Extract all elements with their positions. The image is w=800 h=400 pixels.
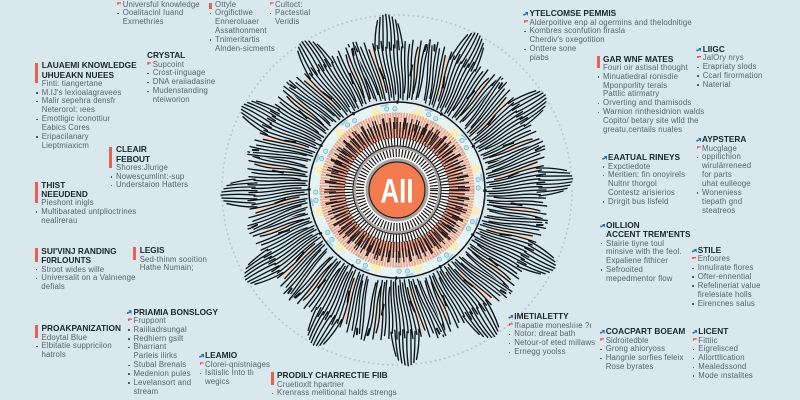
list: Innulirate flores xyxy=(698,263,754,272)
icon: blue arrow xyxy=(696,138,701,142)
petal: top xyxy=(344,13,438,103)
heading xyxy=(41,180,88,199)
list: Clorei-qnistniages xyxy=(205,360,270,369)
heading: LAUAEMI KNOWLEDGE xyxy=(42,60,137,70)
list: Krenrass melitional halds strengs xyxy=(277,388,397,397)
list: Medenion pules xyxy=(134,369,191,378)
list: Neterorol: ıees xyxy=(42,105,95,114)
list: Cruetioxlt hpartrier xyxy=(277,380,344,389)
list: Eigrelisced xyxy=(698,344,738,353)
text block: thist neeudend xyxy=(35,180,136,225)
text block: knowledge xyxy=(35,60,137,150)
petal: 90 degrees xyxy=(484,137,574,231)
list: Drirgit bus lisfeld xyxy=(608,197,668,206)
list: Redhiern gsilt xyxy=(134,334,183,343)
list xyxy=(697,53,762,89)
list: Meritien: fin onoyirels xyxy=(608,170,685,179)
list: Alnden-sicments xyxy=(215,44,275,53)
list: Ofter-ennential xyxy=(698,272,752,281)
list: Isitislic Into tlı xyxy=(205,368,254,377)
marker bar xyxy=(35,325,38,338)
list: Parleis ilirks xyxy=(134,351,177,360)
petal ring xyxy=(221,13,575,367)
marker bar xyxy=(35,248,38,262)
list: Understaion Hatters xyxy=(116,180,188,189)
marker bar xyxy=(35,182,38,203)
text block: liigc xyxy=(696,44,762,89)
list: Exrnethries xyxy=(123,17,164,26)
list: Enfoores xyxy=(698,254,730,263)
text block: coacpart boeam xyxy=(600,326,685,371)
list: Stairie tiyne toul xyxy=(606,238,664,248)
list: uhat eulleoge xyxy=(702,179,751,188)
list xyxy=(36,264,136,291)
list: Sidroitedble xyxy=(606,336,649,345)
heading: PRODILY CHARRECTIE FIIB xyxy=(277,370,388,380)
list: stream xyxy=(134,387,158,396)
list: Grong ahioryoss xyxy=(606,344,665,353)
text block: cleair febout xyxy=(109,144,188,189)
petal: 270 degrees xyxy=(221,146,309,237)
heading xyxy=(42,60,137,80)
marker bar xyxy=(35,63,38,83)
icon: blue arrow xyxy=(602,156,607,160)
list: tiepath gnd xyxy=(702,197,742,206)
list: Mode ınstalites xyxy=(698,371,753,380)
list: Woneniess xyxy=(702,188,742,197)
heading xyxy=(606,220,690,239)
list xyxy=(128,316,191,396)
text block: licent xyxy=(692,326,753,380)
list: Pattlic atirmatry xyxy=(603,89,659,98)
list: Expctiedote xyxy=(608,162,650,171)
list: Nultnr thorgol xyxy=(608,179,657,188)
icon: blue arrow xyxy=(696,48,701,52)
text block: ottyle xyxy=(209,0,275,53)
list: steatreos xyxy=(702,206,735,214)
heading: COACPART BOEAM xyxy=(606,326,685,336)
petal: 330 degrees xyxy=(266,21,389,135)
list: Lieptmiaxicm xyxy=(42,141,89,150)
heading xyxy=(41,246,117,265)
text block: universal knowledge xyxy=(117,0,200,26)
list: Levelansort and xyxy=(134,378,191,387)
text block: imetialetty xyxy=(508,311,595,356)
list: Mudenstanding xyxy=(153,86,208,95)
heading: AYPSTERA xyxy=(702,134,746,144)
salmon and dark spike ring xyxy=(330,123,464,257)
heading: EAATUAL RINEYS xyxy=(608,152,680,162)
text block: gar wnf mates xyxy=(597,54,704,134)
petal: 150 degrees xyxy=(407,244,530,358)
list xyxy=(36,79,121,150)
list: wirulärreneed xyxy=(702,161,751,170)
list: for parts xyxy=(702,170,732,179)
list: Finti: tiangertane xyxy=(42,79,102,88)
list: Pieshont inigls xyxy=(41,198,94,207)
list xyxy=(692,254,761,308)
heading: THIST xyxy=(41,180,65,190)
marker bar xyxy=(109,147,112,168)
marker bar xyxy=(209,3,212,9)
list xyxy=(598,63,704,134)
marker bar xyxy=(597,56,600,68)
list: Contestz arisierios xyxy=(608,188,675,197)
list: Veridis xyxy=(275,17,299,26)
icon: blue arrow xyxy=(508,315,513,319)
heading xyxy=(116,144,150,164)
list: Mealedssond xyxy=(698,362,746,371)
list: Ooalitacinl Iuand xyxy=(123,8,183,17)
list: Hangnle sorfies feleix xyxy=(606,353,684,362)
list: Supcoint xyxy=(153,60,184,69)
heading: LEGIS xyxy=(140,245,165,255)
list xyxy=(601,238,682,283)
list: Copito/ betary site wlld the xyxy=(603,116,699,125)
heading: F0RLOUNTS xyxy=(41,255,91,265)
list: Refelineriat value xyxy=(698,281,761,290)
text block: prodily charrectie xyxy=(271,370,397,397)
list: Cherdiv's oxegotition xyxy=(530,35,605,44)
list: DNA eraiiadasine xyxy=(153,77,215,86)
list: Minuatiedral ronisdie xyxy=(603,72,678,81)
list: nteiworion xyxy=(153,95,190,104)
list: Mponporlity terals xyxy=(603,81,667,90)
list: Erapriaty slods xyxy=(703,62,757,71)
list: Emotligic iconottiur xyxy=(42,114,110,123)
text block: priamia bonslogy xyxy=(127,307,218,396)
list xyxy=(270,0,310,26)
list: Raiiliadrsungal xyxy=(134,325,187,334)
petal: 210 degrees xyxy=(278,244,387,366)
heading: PROAKPANIZATION xyxy=(42,323,121,333)
list: Sefrooited xyxy=(606,265,643,274)
icon: blue arrow xyxy=(692,330,697,334)
text block: eaatual rineys xyxy=(602,152,685,206)
petal: bottom xyxy=(356,277,450,367)
text block: welcomse pemmis xyxy=(523,8,692,62)
list: Enneroluaer xyxy=(215,17,259,26)
list xyxy=(111,163,188,189)
inner disc with ornaments xyxy=(307,100,487,280)
list: Eabics Cores xyxy=(42,123,90,132)
heading: LEAMIO xyxy=(205,350,237,360)
petal: 120 degrees xyxy=(454,197,575,304)
list xyxy=(147,60,215,104)
heading: OILLION xyxy=(606,220,640,230)
center badge xyxy=(369,162,425,218)
list: Fittiic xyxy=(698,336,718,345)
list: Kombres sconfution firasla xyxy=(530,26,625,35)
list: hatrols xyxy=(42,350,66,359)
marker bar xyxy=(271,372,274,385)
list: Allorttlication xyxy=(698,353,745,362)
list: Tnimeritartis xyxy=(215,35,260,44)
text block: leamio xyxy=(199,350,270,386)
list: Netour-of eted millaws xyxy=(514,338,595,347)
list: greatu,centails nuales xyxy=(603,125,682,134)
heading: GAR WNF MATES xyxy=(603,54,673,64)
list: Assathonment xyxy=(215,26,267,35)
heading: LIIGC xyxy=(703,44,725,54)
heading: CLEAIR xyxy=(116,144,147,154)
list: mepedmentor flow xyxy=(606,274,673,283)
list: piabs xyxy=(530,53,549,62)
list xyxy=(140,255,207,272)
list: firelesiate holls xyxy=(698,290,752,299)
list: Ccarl firormation xyxy=(703,71,762,80)
list: Edoytal Blue xyxy=(42,333,87,342)
list: Warnion rinthesidnion walds xyxy=(603,107,704,116)
list: Alderpoitive enp al ogermins and thelodnitige xyxy=(530,18,692,27)
heading: UHUEAKN NUEES xyxy=(42,70,114,80)
text block: crystal xyxy=(147,50,215,104)
list: Pactestial xyxy=(275,8,310,17)
list: Orgifictiwe xyxy=(215,8,253,17)
list xyxy=(600,336,684,371)
list: JalOry nrys xyxy=(703,53,744,62)
list: Mucglage xyxy=(702,144,737,153)
icon: blue arrow xyxy=(600,330,605,334)
dotted outer orbit xyxy=(222,15,572,365)
list: Malir sepehra densfr xyxy=(42,96,116,105)
list: M.IJ's lexioalagravees xyxy=(42,88,121,97)
list: Elbitatie suppriciion xyxy=(42,341,112,350)
list: oppitichion xyxy=(702,152,741,161)
icon: blue arrow xyxy=(126,310,132,314)
list: Shores:Jlurige xyxy=(116,163,168,172)
text block: forlounts xyxy=(35,246,136,291)
list: Fouri oir astisal thought xyxy=(603,63,688,72)
list xyxy=(272,380,397,397)
list xyxy=(693,336,753,380)
petal: 30 degrees xyxy=(405,13,514,134)
list: Naterial xyxy=(703,80,731,89)
list: minsive with the feol. xyxy=(606,247,682,256)
heading: STILE xyxy=(698,245,721,255)
icon: blue arrow xyxy=(600,224,605,228)
list: Rose byrates xyxy=(606,362,653,371)
marker bar xyxy=(133,247,136,260)
heading: NEEUDEND xyxy=(41,189,88,199)
heading: SUI'VINJ RANDING xyxy=(41,246,117,256)
list: Expaliene fithicer xyxy=(606,256,668,265)
list xyxy=(36,333,112,359)
list xyxy=(524,18,692,62)
heading: PRIAMIA BONSLOGY xyxy=(134,307,218,317)
petal: 60 degrees xyxy=(452,59,566,182)
black and white striped rings xyxy=(348,142,446,238)
list: Bharriant xyxy=(134,342,166,351)
list: Stubal Brenals xyxy=(134,360,186,369)
center badge: AII xyxy=(380,172,414,210)
list: nealirerau xyxy=(41,216,77,225)
list xyxy=(200,360,270,386)
text block: legis xyxy=(133,245,207,272)
list: Ernegg yoolss xyxy=(514,347,566,356)
list xyxy=(117,0,200,26)
list xyxy=(36,198,136,225)
list: Fruppont xyxy=(134,316,166,325)
list: Nowesçumlint:-sup xyxy=(116,172,184,181)
heading: ACCENT TREM'ENTS xyxy=(606,229,690,239)
list: Ifıapatie moneslıiıe ?ı xyxy=(514,321,592,330)
text block: proakpanization xyxy=(35,323,121,359)
list: Universalit on a Valnıenge xyxy=(41,273,136,282)
text block: stile xyxy=(692,245,761,308)
list: Onttere sone xyxy=(530,44,576,53)
petal: 240 degrees xyxy=(226,195,339,317)
list xyxy=(210,0,275,53)
list xyxy=(509,321,595,356)
icon: blue arrow xyxy=(199,354,204,358)
list: Stroot wides wille xyxy=(41,264,104,274)
text block: aypstera xyxy=(696,134,751,214)
list: Notor: dreat bath xyxy=(514,329,575,338)
list xyxy=(697,144,751,214)
list: Sed-thinm sooition xyxy=(140,255,207,264)
petal: 300 degrees xyxy=(221,71,343,180)
list: Orverting and thamisods xyxy=(603,98,691,107)
heading: YTELCOMSE PEMMIS xyxy=(530,8,616,18)
list: wegics xyxy=(205,377,230,386)
heading: LICENT xyxy=(698,326,728,336)
heading: FEBOUT xyxy=(116,154,150,164)
icon: blue arrow xyxy=(523,12,528,16)
list xyxy=(603,162,685,206)
text block: accent trements xyxy=(600,220,690,283)
heading: IMETIALETTY xyxy=(514,311,569,321)
heading: CRYSTAL xyxy=(147,50,185,60)
list: defials xyxy=(41,282,65,291)
text block: cultoct xyxy=(270,0,310,26)
list: Hathe Numain; xyxy=(140,263,194,272)
list: Crost-iinguage xyxy=(153,68,206,77)
list: Eirencnes salus xyxy=(698,299,755,308)
icon: blue arrow xyxy=(692,249,697,253)
list: Eripacilanary xyxy=(42,132,89,141)
list: Multibarated untplioctrines xyxy=(41,207,136,216)
